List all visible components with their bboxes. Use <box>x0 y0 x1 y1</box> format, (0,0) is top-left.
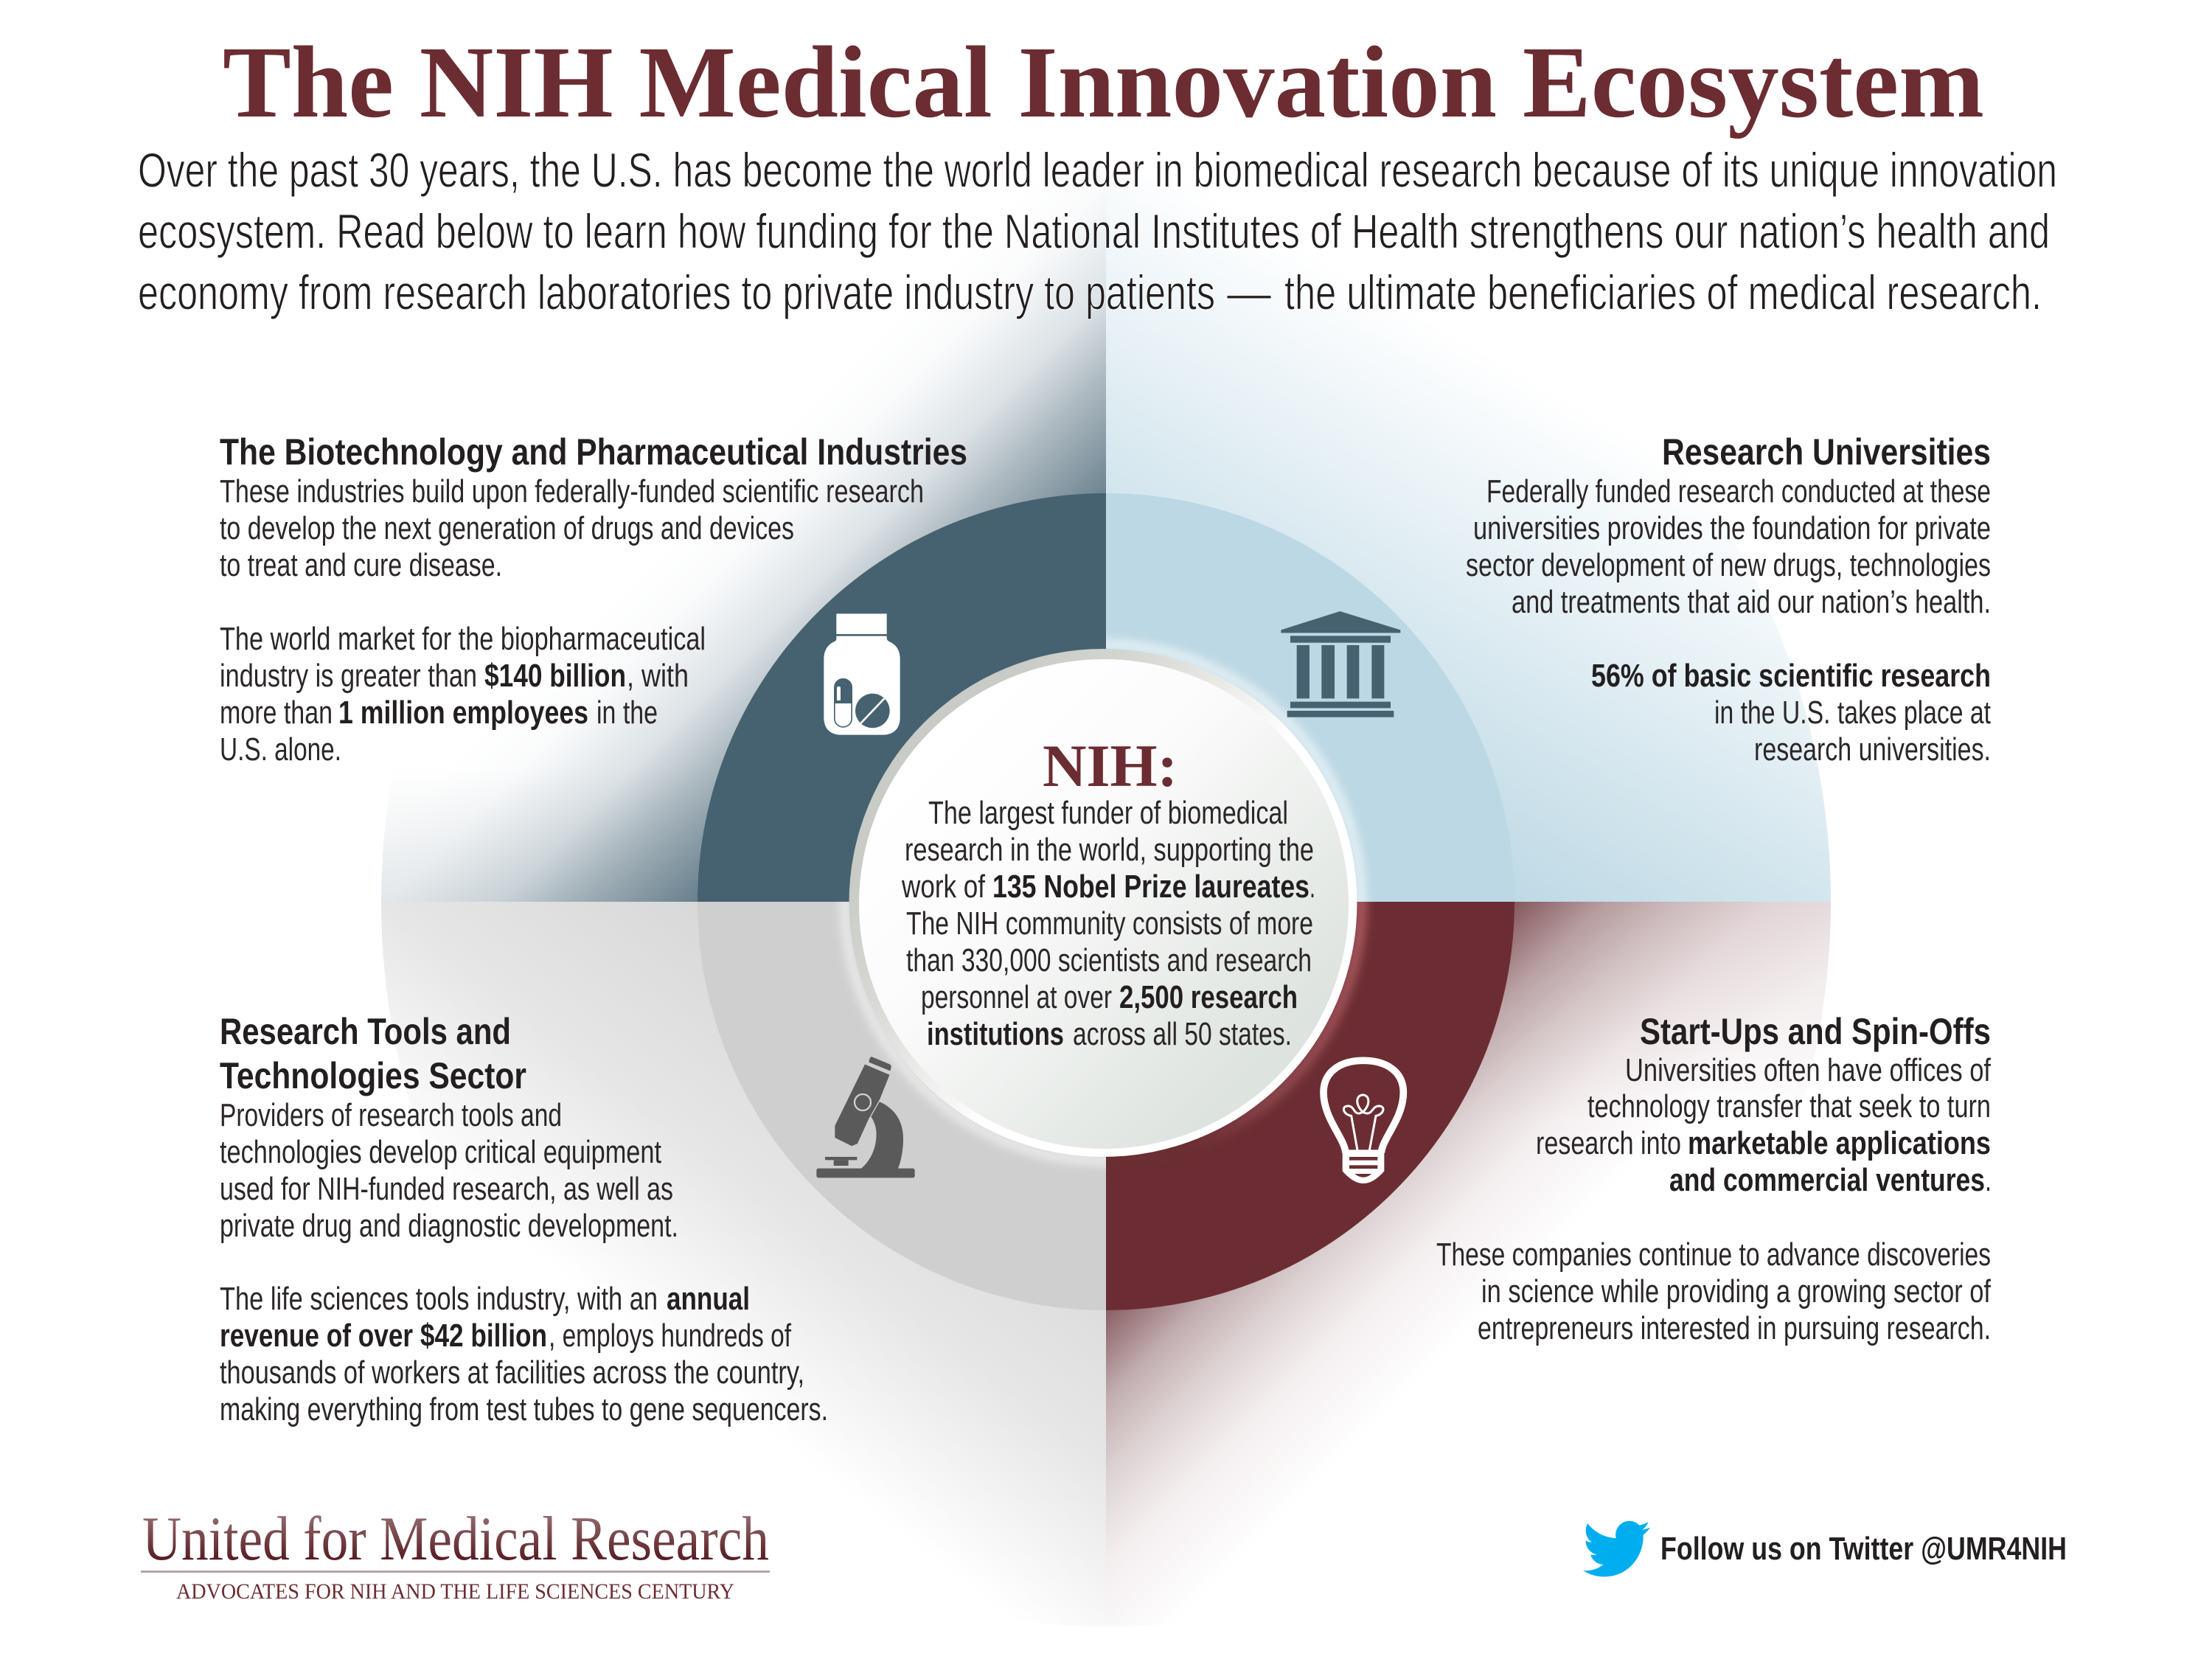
intro paragraph: economy from research laboratories to private industry to patients <box>138 265 1215 320</box>
body text: research tools: private drug and diagnostic development. <box>220 1208 678 1244</box>
body text: NIH: work of <box>901 869 986 905</box>
body text: research universities: 56% of basic scientific research <box>1591 658 1991 694</box>
twitter follow callout <box>1583 1521 2067 1576</box>
body text: research tools <box>220 1097 828 1427</box>
body text: biotechnology: to develop the next generation of drugs and devices <box>220 510 794 546</box>
body text: start-ups: and commercial ventures <box>1669 1162 1985 1198</box>
body text: NIH <box>901 795 1315 1052</box>
body text: start-ups: entrepreneurs interested in pursuing research. <box>1478 1310 1991 1346</box>
body text: NIH: institutions <box>927 1016 1064 1052</box>
body text: start-ups: research into <box>1536 1125 1681 1161</box>
body text: start-ups: . <box>1985 1162 1992 1198</box>
logo: United for Medical Research: United for Medical Research <box>142 1504 769 1573</box>
body text: start-ups: Universities often have offices of <box>1625 1052 1992 1088</box>
logo: United for Medical Research <box>141 1504 770 1604</box>
intro paragraph <box>138 143 2057 320</box>
body text: biotechnology: The world market for the biopharmaceutical <box>220 621 706 657</box>
body text: start-ups: marketable applications <box>1688 1125 1991 1161</box>
body text: start-ups: in science while providing a growing sector of <box>1481 1273 1992 1310</box>
body text: research universities: sector development of new drugs, technologies <box>1466 547 1991 583</box>
body text: NIH: 135 Nobel Prize laureates <box>992 869 1310 905</box>
body text: research universities: research universities. <box>1754 731 1991 768</box>
central beveled circle <box>849 649 1357 1157</box>
body text: research tools: technologies develop critical equipment <box>220 1134 661 1170</box>
body text: research tools: used for NIH-funded research, as well as <box>220 1171 673 1207</box>
body text: start-ups: These companies continue to advance discoveries <box>1436 1237 1991 1273</box>
heading: biotechnology: The Biotechnology and Pharmaceutical Industries <box>220 431 967 473</box>
body text: research universities: and treatments that aid our nation’s health. <box>1512 584 1991 620</box>
body text: NIH: The largest funder of biomedical <box>928 795 1288 831</box>
body text: research tools: annual <box>667 1281 750 1317</box>
body text: NIH: personnel at over <box>921 979 1112 1015</box>
panel: research universities <box>1466 431 1991 768</box>
panel: biotechnology and pharmaceutical industries <box>220 431 967 768</box>
body text: research universities <box>1466 473 1991 768</box>
icon: microscope <box>816 1057 915 1178</box>
body text: NIH: across all 50 states. <box>1073 1016 1292 1052</box>
panel: NIH center text <box>901 732 1315 1052</box>
body text: research tools: revenue of over $42 billion <box>220 1318 547 1354</box>
body text: biotechnology: These industries build upon federally-funded scientific research <box>220 473 924 509</box>
body text: research universities: Federally funded research conducted at these <box>1486 473 1991 509</box>
heading: research tools: Technologies Sector <box>220 1055 526 1096</box>
body text: biotechnology: U.S. alone. <box>220 731 341 768</box>
body text: NIH: than 330,000 scientists and research <box>906 942 1312 978</box>
heading: NIH: NIH: <box>1043 732 1178 799</box>
body text: research tools: making everything from test tubes to gene sequencers. <box>220 1391 828 1427</box>
heading: research tools: Research Tools and <box>220 1011 511 1052</box>
body text: research universities: in the U.S. takes place at <box>1714 695 1991 731</box>
icon: twitter bird <box>1583 1521 1650 1576</box>
body text: research tools: Providers of research tools and <box>220 1097 562 1133</box>
heading: research tools <box>220 1011 526 1096</box>
body text: NIH: 2,500 research <box>1119 979 1298 1015</box>
title: The NIH Medical Innovation Ecosystem <box>223 26 1984 139</box>
heading: research universities: Research Universities <box>1662 431 1991 473</box>
body text: biotechnology: , with <box>627 658 689 694</box>
colored ring with four quadrants <box>698 493 1514 1310</box>
icon: pill bottle <box>824 613 900 735</box>
body text: biotechnology: in the <box>597 695 658 731</box>
body text: biotechnology <box>220 473 924 768</box>
body text: research universities: universities provides the foundation for private <box>1473 510 1991 546</box>
body text: research tools: thousands of workers at facilities across the country, <box>220 1354 804 1391</box>
body text: biotechnology: 1 million employees <box>338 695 588 731</box>
body text: biotechnology: $140 billion <box>484 658 626 694</box>
body text: research tools: The life sciences tools industry, with an <box>220 1281 658 1317</box>
body text: biotechnology: more than <box>220 695 333 731</box>
body text: NIH: research in the world, supporting the <box>905 832 1314 868</box>
body text: NIH: The NIH community consists of more <box>906 905 1313 942</box>
body text: biotechnology: to treat and cure disease. <box>220 547 502 583</box>
background quadrant circle <box>381 177 1831 1627</box>
body text: start-ups: technology transfer that seek to turn <box>1587 1088 1991 1124</box>
panel: start-ups and spin-offs <box>1436 1011 1992 1346</box>
logo: United for Medical Research: ADVOCATES FOR NIH AND THE LIFE SCIENCES CENTURY <box>176 1579 734 1604</box>
body text: start-ups <box>1436 1052 1992 1346</box>
body text: research tools: , employs hundreds of <box>549 1318 792 1354</box>
intro paragraph: — <box>1227 265 1271 320</box>
icon: light bulb <box>1324 1060 1403 1183</box>
heading: start-ups: Start-Ups and Spin-Offs <box>1640 1011 1991 1052</box>
icon: university building <box>1281 611 1400 717</box>
body text: biotechnology: industry is greater than <box>220 658 477 694</box>
body text: NIH: . <box>1310 869 1315 905</box>
panel: research tools and technologies sector <box>220 1011 828 1427</box>
twitter handle text: Follow us on Twitter @UMR4NIH <box>1660 1531 2067 1567</box>
